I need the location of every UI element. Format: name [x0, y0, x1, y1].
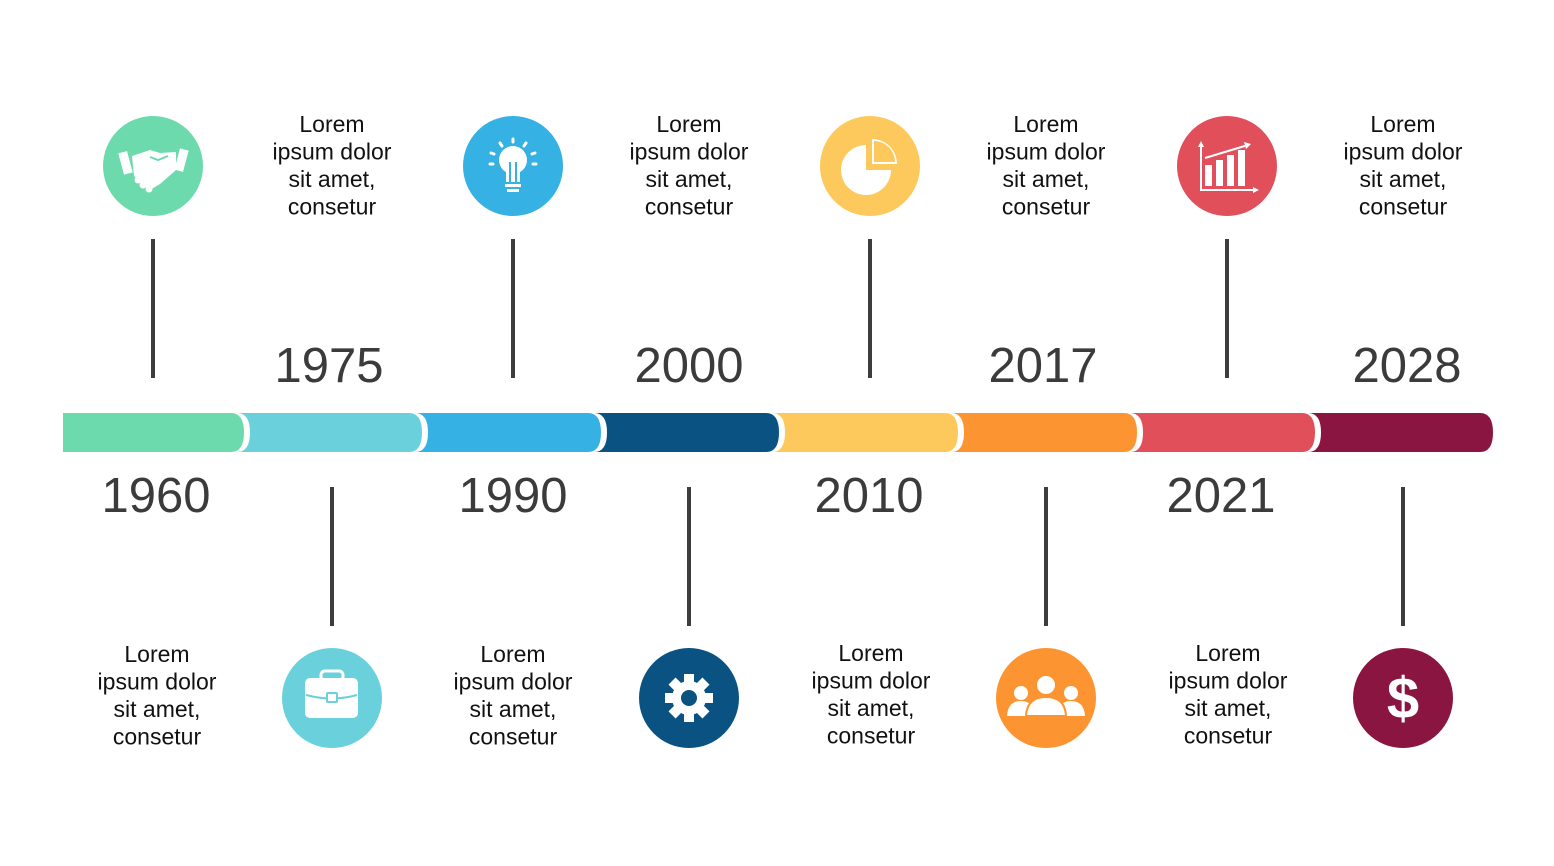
text blocks: ipsum dolor: [812, 668, 931, 694]
text blocks: ipsum dolor: [98, 668, 217, 694]
icon: group of people: [996, 648, 1096, 748]
text blocks: ipsum dolor: [630, 138, 749, 164]
text blocks: consetur: [1002, 194, 1090, 220]
text blocks: consetur: [113, 724, 201, 750]
text blocks: ipsum dolor: [1344, 138, 1463, 164]
icon: gear: [639, 648, 739, 748]
text blocks: Lorem: [299, 111, 365, 137]
icon: briefcase: [282, 648, 382, 748]
text blocks: Lorem: [480, 641, 546, 667]
text blocks: Lorem: [656, 111, 722, 137]
years: 1975: [274, 339, 384, 393]
years: 1960: [101, 469, 211, 523]
text blocks: sit amet,: [1360, 166, 1446, 192]
years: 2021: [1166, 469, 1276, 523]
years: 2010: [814, 469, 924, 523]
text blocks: sit amet,: [646, 166, 732, 192]
text blocks: consetur: [827, 722, 915, 748]
text blocks: [98, 111, 1463, 750]
years: [101, 339, 1462, 523]
years: 2017: [988, 339, 1098, 393]
text blocks: Lorem: [1370, 111, 1436, 137]
text blocks: Lorem: [124, 641, 190, 667]
icon: pie chart: [820, 116, 920, 216]
icon: bar chart growth: [1177, 116, 1277, 216]
text blocks: sit amet,: [1003, 166, 1089, 192]
text blocks: ipsum dolor: [273, 138, 392, 164]
text blocks: sit amet,: [828, 695, 914, 721]
text blocks: ipsum dolor: [1169, 668, 1288, 694]
text blocks: consetur: [645, 194, 733, 220]
connector lines: [153, 239, 1403, 626]
text blocks: sit amet,: [289, 166, 375, 192]
icon: handshake: [103, 116, 203, 216]
years: 2028: [1352, 339, 1462, 393]
icon: lightbulb: [463, 116, 563, 216]
text blocks: Lorem: [1195, 640, 1261, 666]
text blocks: ipsum dolor: [454, 668, 573, 694]
icon: dollar: $: [1387, 666, 1419, 731]
years: 1990: [458, 469, 568, 523]
icon: dollar: [1353, 648, 1453, 748]
text blocks: Lorem: [1013, 111, 1079, 137]
text blocks: Lorem: [838, 640, 904, 666]
text blocks: sit amet,: [114, 696, 200, 722]
text blocks: consetur: [1184, 722, 1272, 748]
text blocks: consetur: [1359, 194, 1447, 220]
text blocks: consetur: [288, 194, 376, 220]
text blocks: consetur: [469, 724, 557, 750]
text blocks: sit amet,: [470, 696, 556, 722]
years: 2000: [634, 339, 744, 393]
text blocks: ipsum dolor: [987, 138, 1106, 164]
timeline bar: [63, 413, 1493, 452]
text blocks: sit amet,: [1185, 695, 1271, 721]
